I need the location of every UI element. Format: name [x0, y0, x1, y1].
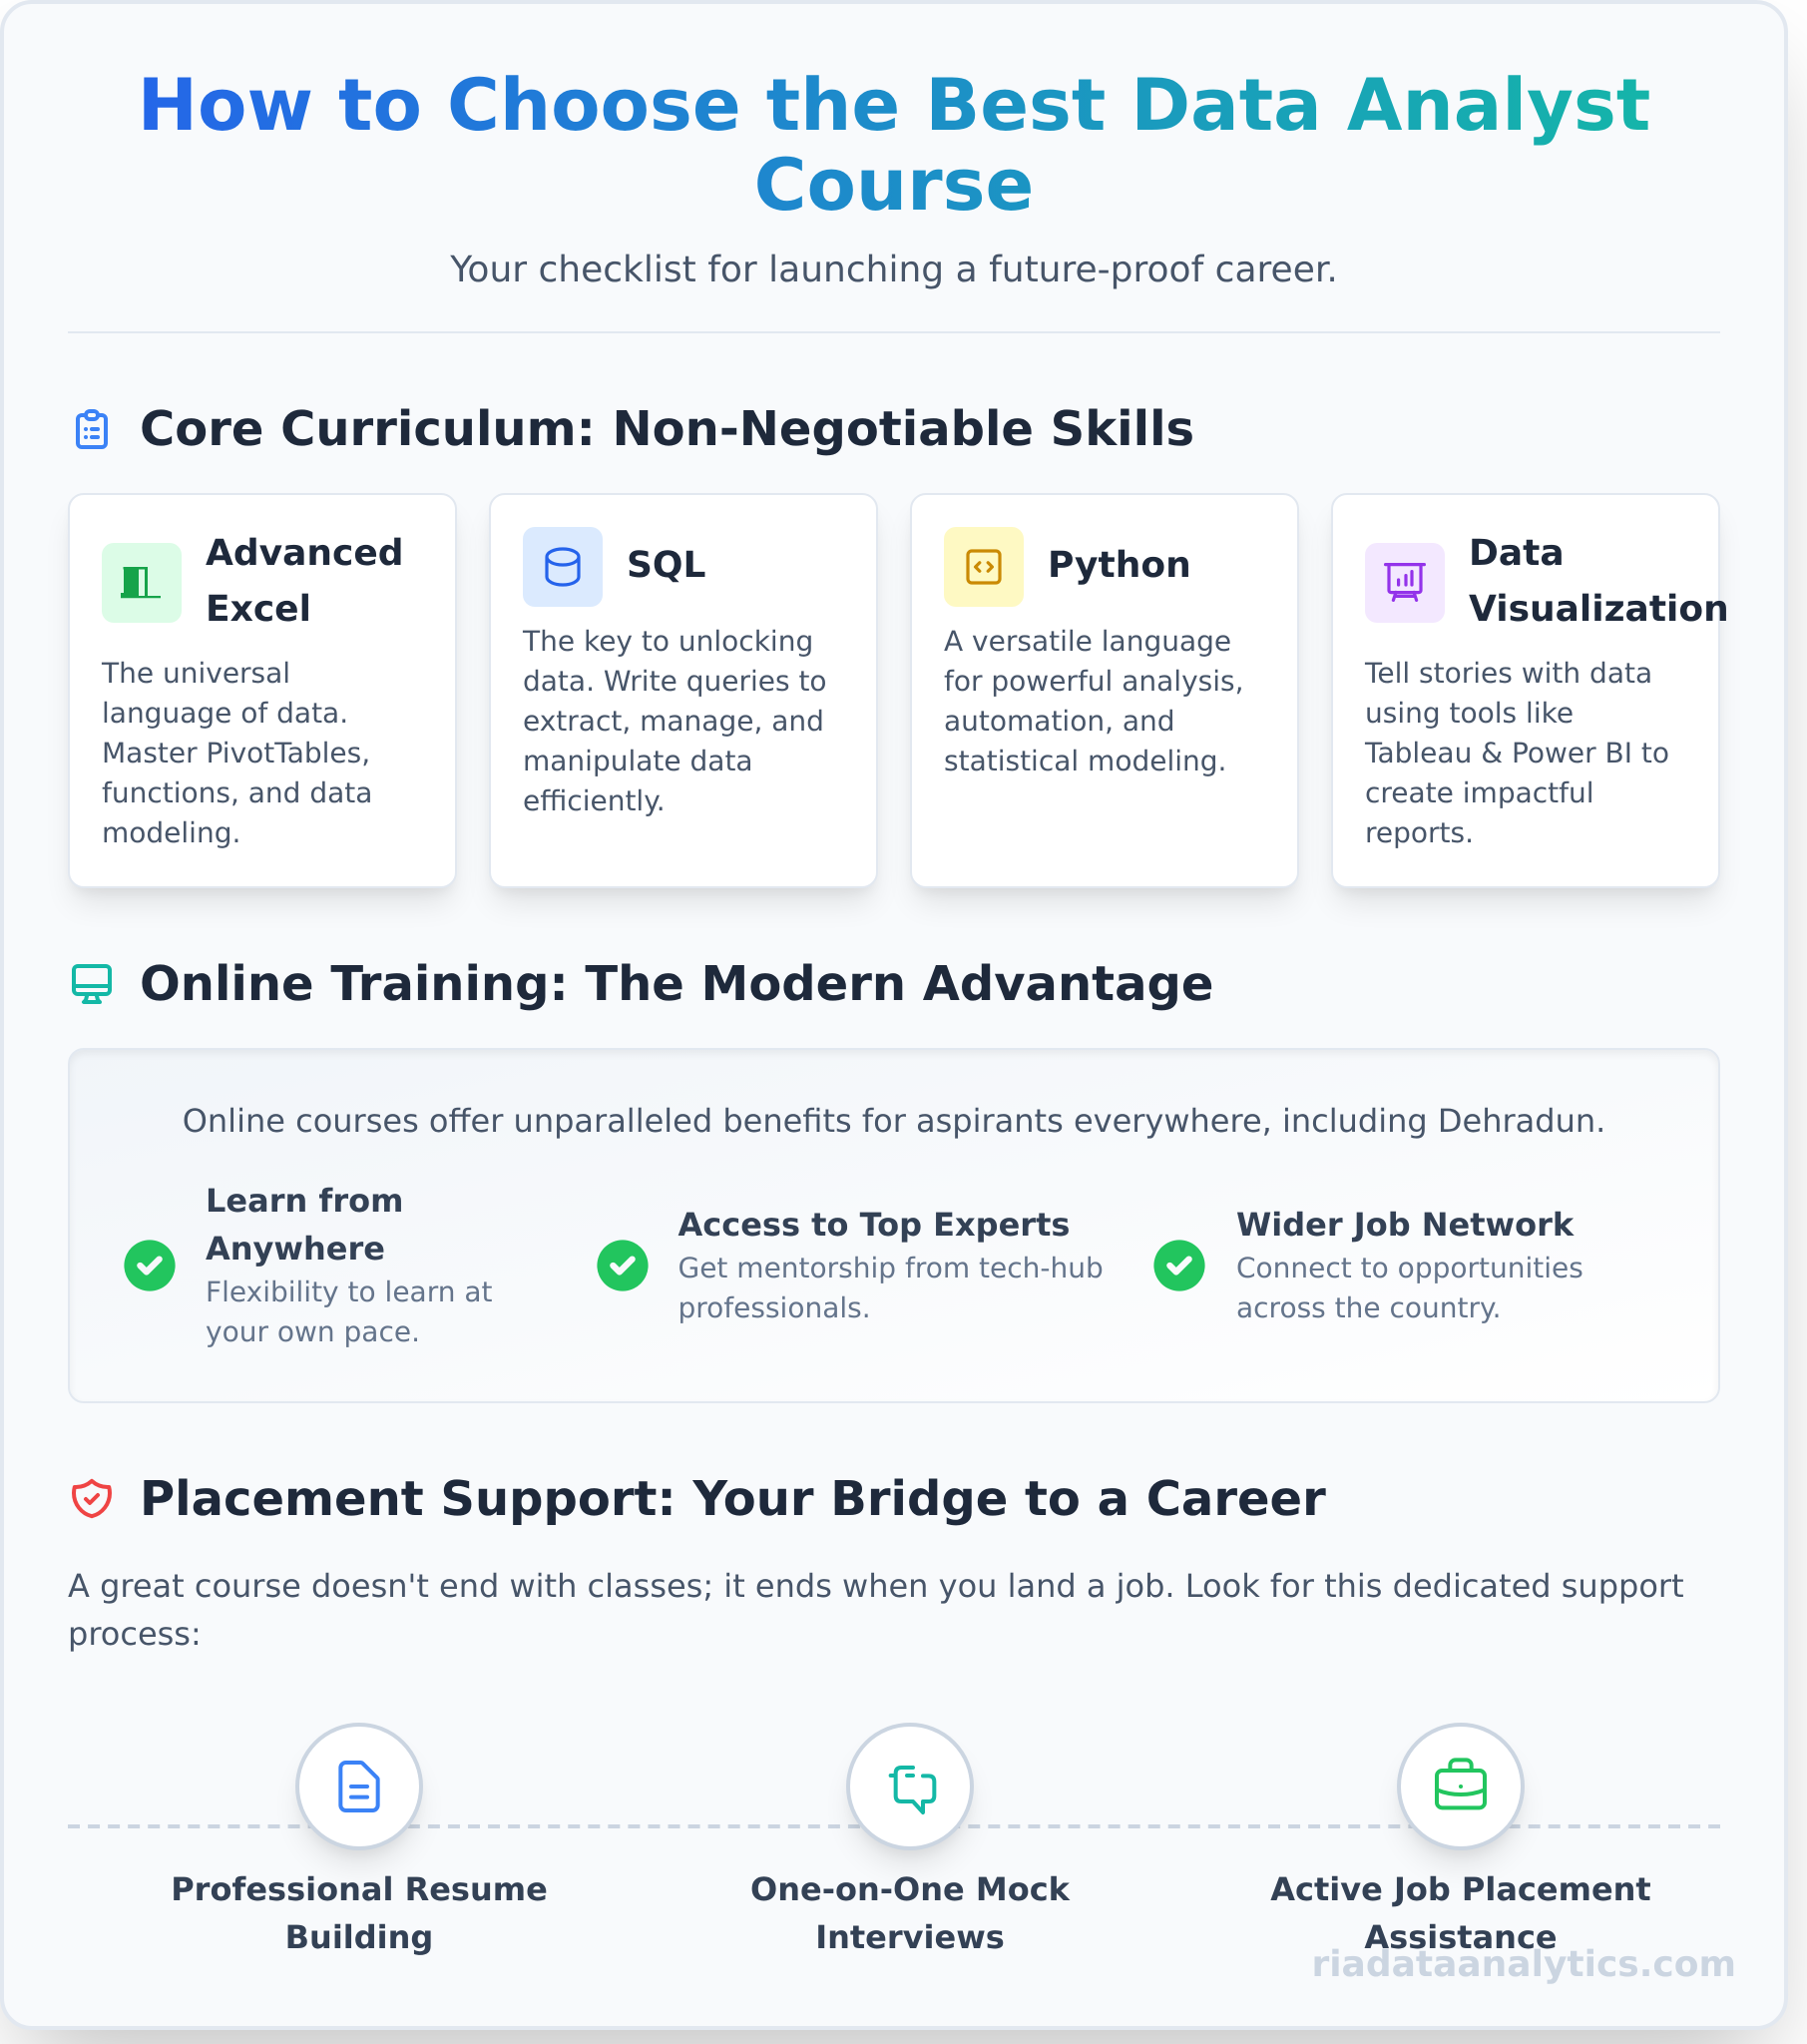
heading: placement support: Placement Support: Your Bridge to a Career — [140, 1471, 1326, 1527]
icon: database — [523, 527, 603, 607]
icon: clipboard — [76, 409, 108, 449]
watermark: riadataanalytics.com — [1311, 1944, 1736, 1985]
card title: Excel — [206, 589, 311, 630]
placement intro text: A great course doesn't end with classes; it ends when you land a job. Look for this dedicated support — [68, 1567, 1684, 1605]
panel: Advanced Excel card — [68, 493, 457, 888]
title: How to Choose the Best Data Analyst — [138, 63, 1650, 147]
placement intro text — [68, 1567, 1684, 1653]
card text — [1365, 657, 1669, 849]
card title: SQL — [627, 545, 705, 586]
panel: SQL card — [489, 493, 878, 888]
icon: check — [124, 1240, 176, 1291]
card text: Tell stories with data — [1365, 657, 1652, 690]
card text: manipulate data — [523, 745, 753, 777]
benefit: learn from anywhere: your own pace. — [206, 1315, 420, 1348]
title — [68, 65, 1720, 225]
benefit: wider job network: Connect to opportunities — [1236, 1252, 1583, 1284]
icon: resume document — [295, 1723, 423, 1850]
card text: reports. — [1365, 816, 1474, 849]
card text: statistical modeling. — [944, 745, 1226, 777]
benefit: access to top experts: Get mentorship from tech-hub — [678, 1252, 1104, 1284]
placement intro text: process: — [68, 1615, 202, 1653]
benefit: learn from anywhere: Anywhere — [206, 1230, 385, 1268]
benefit: wider job network: Wider Job Network — [1236, 1206, 1574, 1244]
card text: Tableau & Power BI to — [1365, 737, 1669, 769]
label: resume — [171, 1870, 548, 1956]
label: resume: Professional Resume — [171, 1870, 548, 1908]
benefit: learn from anywhere — [206, 1182, 493, 1348]
icon: excel — [102, 543, 182, 623]
card text: functions, and data — [102, 776, 372, 809]
card title: Advanced — [206, 533, 404, 574]
benefit: access to top experts — [678, 1206, 1104, 1324]
card text: modeling. — [102, 816, 240, 849]
panel: online benefits — [68, 1048, 1720, 1403]
label: placement — [1270, 1870, 1651, 1956]
benefit: learn from anywhere: Learn from — [206, 1182, 403, 1220]
card text: create impactful — [1365, 776, 1594, 809]
card text: using tools like — [1365, 697, 1574, 730]
card text: automation, and — [944, 705, 1175, 738]
benefit: access to top experts: professionals. — [678, 1291, 871, 1324]
card text: The universal — [102, 657, 290, 690]
benefit: learn from anywhere: Flexibility to learn at — [206, 1276, 493, 1308]
label: placement: Active Job Placement — [1270, 1870, 1651, 1908]
label: interviews: Interviews — [815, 1918, 1005, 1956]
card title: Data — [1469, 533, 1565, 574]
card text: efficiently. — [523, 784, 666, 817]
label: interviews — [750, 1870, 1070, 1956]
card text: extract, manage, and — [523, 705, 824, 738]
icon: monitor — [72, 964, 112, 1004]
card text: The key to unlocking — [523, 625, 813, 658]
icon: interview chat — [846, 1723, 974, 1850]
card title — [1469, 533, 1729, 630]
benefit: wider job network: across the country. — [1236, 1291, 1501, 1324]
card title — [206, 533, 404, 630]
icon: check — [1153, 1240, 1205, 1291]
card text: data. Write queries to — [523, 665, 827, 698]
card text — [102, 657, 372, 849]
icon: briefcase — [1397, 1723, 1525, 1850]
heading: online training: Online Training: The Modern Advantage — [140, 956, 1213, 1012]
card text: Master PivotTables, — [102, 737, 370, 769]
label: placement: Assistance — [1364, 1918, 1558, 1956]
panel: Data Visualization card — [1331, 493, 1720, 888]
card text — [523, 625, 827, 817]
card text: language of data. — [102, 697, 348, 730]
card title: Python — [1048, 545, 1191, 586]
intro text: Online courses offer unparalleled benefits for aspirants everywhere, including Dehradun. — [183, 1102, 1605, 1140]
panel: Python card — [910, 493, 1299, 888]
icon: check — [597, 1240, 649, 1291]
icon: shield check — [72, 1479, 112, 1519]
card title: Visualization — [1469, 589, 1729, 630]
icon: presentation chart — [1365, 543, 1445, 623]
card text: for powerful analysis, — [944, 665, 1243, 698]
subtitle: Your checklist for launching a future-proof career. — [450, 250, 1338, 290]
benefit: wider job network — [1236, 1206, 1583, 1324]
label: resume: Building — [285, 1918, 433, 1956]
card text: A versatile language — [944, 625, 1231, 658]
icon: code — [944, 527, 1024, 607]
benefit: access to top experts: Access to Top Experts — [678, 1206, 1070, 1244]
title: Course — [754, 143, 1034, 227]
label: interviews: One-on-One Mock — [750, 1870, 1070, 1908]
card text — [944, 625, 1243, 777]
heading: core curriculum: Core Curriculum: Non-Negotiable Skills — [140, 401, 1194, 457]
